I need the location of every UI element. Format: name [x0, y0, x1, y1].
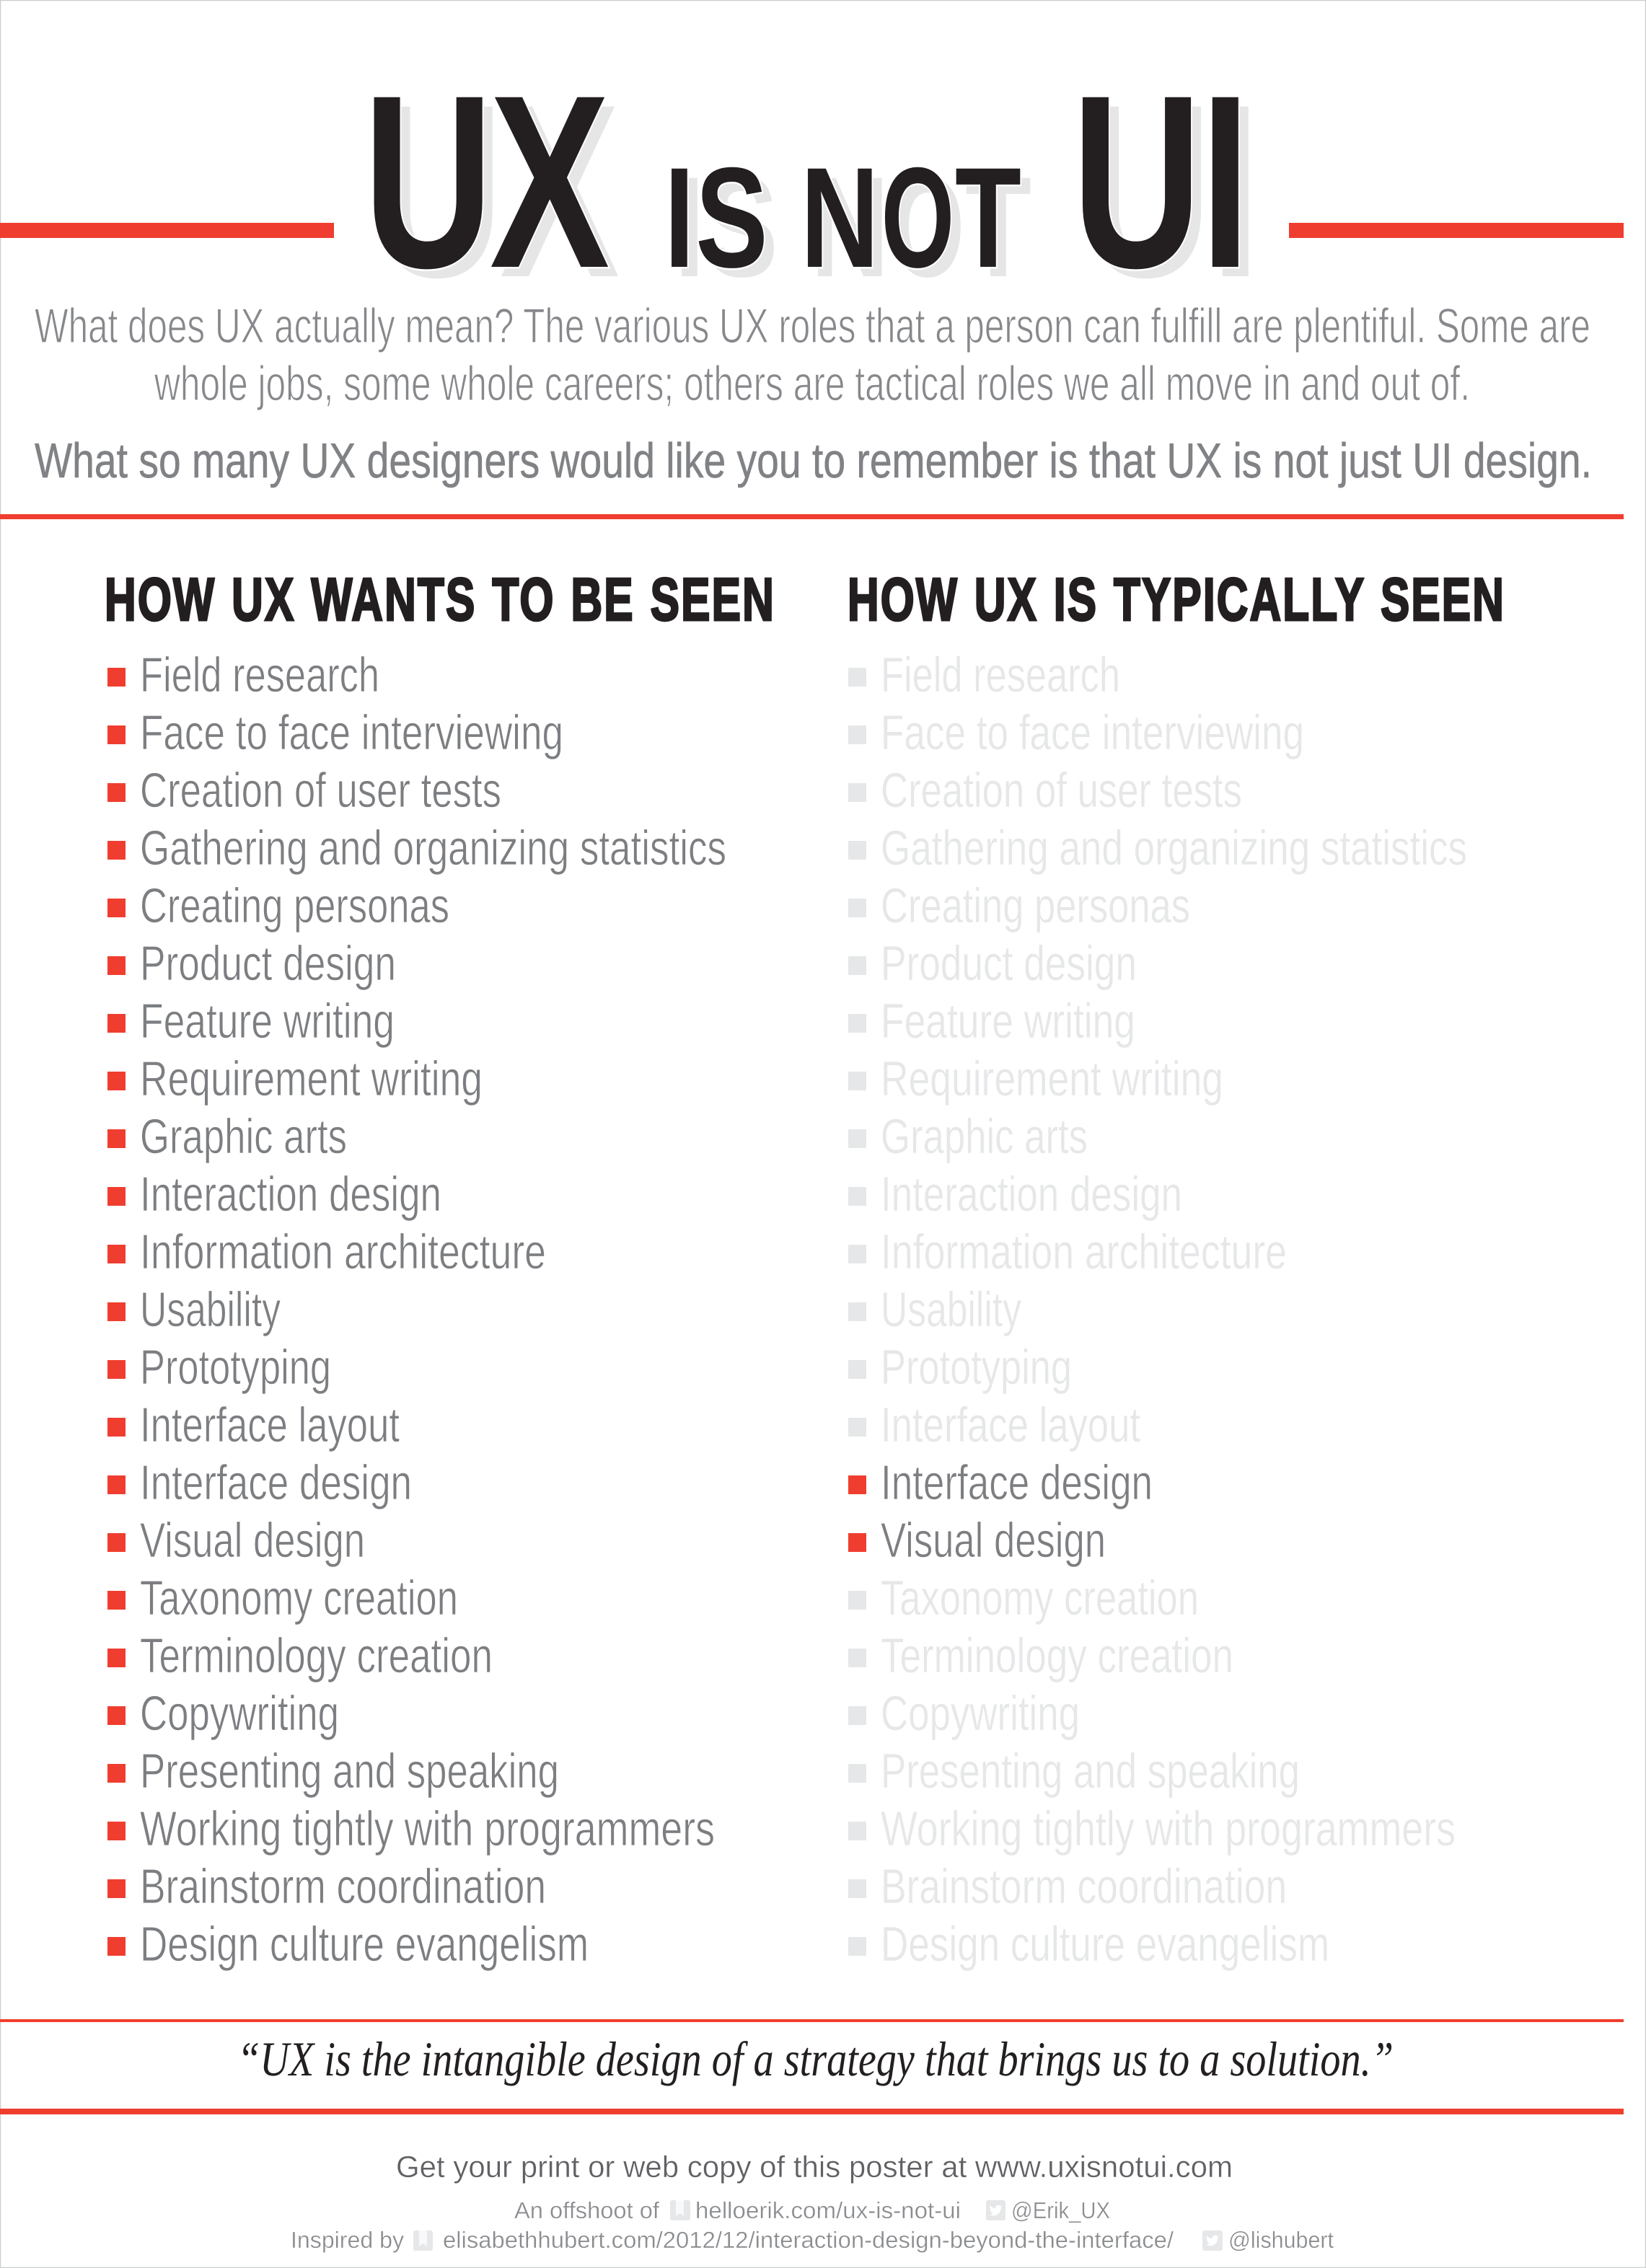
icon: bookmark: [670, 2200, 690, 2220]
item: Product design: Product design: [140, 936, 396, 991]
item: Feature writing: Feature writing: [140, 994, 395, 1049]
title: IS: [674, 147, 778, 306]
title: UX: [364, 44, 611, 319]
icon: twitter: [986, 2200, 1005, 2220]
list: how UX wants to be seen: [107, 648, 726, 1972]
item: Prototyping (faded): [848, 1340, 1072, 1395]
item: Requirement writing (faded): Requirement writing: [881, 1051, 1223, 1106]
item: Gathering and organizing statistics (faded): Gathering and organizing statistics: [881, 821, 1467, 875]
credit line 1: helloerik.com/ux-is-not-ui: [695, 2197, 961, 2223]
item: Brainstorm coordination: Brainstorm coordination: [140, 1859, 546, 1914]
item: Visual design (highlighted): [848, 1513, 1106, 1568]
item: Working tightly with programmers (faded): Working tightly with programmers: [881, 1801, 1456, 1856]
item: Graphic arts (faded): Graphic arts: [881, 1109, 1088, 1164]
item: Field research: Field research: [140, 648, 379, 702]
title: UI: [1082, 53, 1260, 329]
item: Prototyping: Prototyping: [140, 1340, 331, 1395]
title: O: [881, 138, 954, 297]
item: Feature writing (faded): Feature writing: [881, 994, 1135, 1049]
title: T: [955, 138, 1021, 297]
credit line 2: [291, 2227, 1334, 2253]
credit line 1: An offshoot of: [514, 2197, 659, 2223]
item: Brainstorm coordination (faded): Brainstorm coordination: [881, 1859, 1287, 1914]
item: Graphic arts: [107, 1109, 347, 1164]
item: Creating personas (faded): Creating personas: [881, 878, 1190, 933]
credit line 1: @Erik_UX: [1011, 2197, 1110, 2223]
item: Visual design (highlighted): Visual design: [881, 1513, 1106, 1568]
item: Requirement writing: Requirement writing: [140, 1051, 483, 1106]
item: Information architecture: Information architecture: [140, 1225, 546, 1279]
item: Design culture evangelism: Design culture evangelism: [140, 1917, 589, 1972]
title: UX: [374, 53, 621, 329]
item: Usability (faded): [848, 1282, 1021, 1337]
title rule left: [0, 223, 334, 238]
item: Creation of user tests: Creation of user tests: [140, 763, 501, 818]
item: Product design (faded): Product design: [881, 936, 1137, 991]
credit line 1: [514, 2197, 1110, 2223]
item: Presenting and speaking: Presenting and speaking: [140, 1744, 559, 1799]
intro text: [35, 299, 1590, 411]
title: N: [811, 147, 889, 306]
credit line 2: elisabethhubert.com/2012/12/interaction-design-beyond-the-interface/: [443, 2227, 1174, 2253]
item: Taxonomy creation (faded): Taxonomy creation: [881, 1571, 1199, 1625]
item: Terminology creation: Terminology creation: [140, 1628, 493, 1683]
divider: [0, 514, 1624, 519]
title: UI: [1072, 44, 1250, 319]
item: Field research: [107, 648, 379, 702]
item: Interface layout (faded): Interface layout: [881, 1398, 1140, 1452]
icon: twitter: [1202, 2231, 1223, 2251]
item: Interface layout: Interface layout: [140, 1398, 400, 1452]
item: Creation of user tests (faded): Creation of user tests: [881, 763, 1242, 818]
item: Taxonomy creation: Taxonomy creation: [140, 1571, 458, 1625]
credit line 2: @lishubert: [1228, 2227, 1334, 2253]
item: Copywriting: Copywriting: [140, 1686, 339, 1741]
item: Face to face interviewing: Face to face interviewing: [140, 705, 563, 760]
item: Visual design: [107, 1513, 365, 1568]
item: Copywriting (faded): Copywriting: [881, 1686, 1080, 1741]
item: Copywriting: [107, 1686, 339, 1741]
item: Visual design: Visual design: [140, 1513, 365, 1568]
call to action: Get your print or web copy of this poster at www.uxisnotui.com: [396, 2150, 1233, 2184]
item: Information architecture (faded): Information architecture: [881, 1225, 1287, 1279]
title: N: [801, 138, 879, 297]
title: [364, 44, 1260, 329]
item: Usability: Usability: [140, 1282, 281, 1337]
item: Design culture evangelism (faded): Design culture evangelism: [881, 1917, 1329, 1972]
quote rule bottom: [0, 2109, 1624, 2114]
item: Interface design: Interface design: [140, 1455, 412, 1510]
item: Gathering and organizing statistics: Gathering and organizing statistics: [140, 821, 726, 875]
list: how UX is typically seen: [848, 648, 1467, 1972]
item: Prototyping: [107, 1340, 331, 1395]
item: Interaction design: Interaction design: [140, 1167, 441, 1222]
item: Creating personas: Creating personas: [140, 878, 449, 933]
item: Prototyping (faded): Prototyping: [881, 1340, 1072, 1395]
item: Presenting and speaking (faded): Presenting and speaking: [881, 1744, 1300, 1799]
item: Field research (faded): [848, 648, 1120, 702]
item: Working tightly with programmers: Working tightly with programmers: [140, 1801, 715, 1856]
item: Graphic arts (faded): [848, 1109, 1088, 1164]
icon: bookmark: [413, 2231, 433, 2251]
item: Face to face interviewing (faded): Face to face interviewing: [881, 705, 1304, 760]
item: Graphic arts: Graphic arts: [140, 1109, 347, 1164]
title: O: [892, 147, 964, 306]
item: Copywriting (faded): [848, 1686, 1080, 1741]
quote rule top: [0, 2019, 1624, 2022]
item: Usability: [107, 1282, 281, 1337]
quote: “UX is the intangible design of a strategy that brings us to a solution.”: [237, 2031, 1394, 2086]
item: Usability (faded): Usability: [881, 1282, 1021, 1337]
title: T: [965, 147, 1031, 306]
item: Interaction design (faded): Interaction design: [881, 1167, 1182, 1222]
item: Terminology creation (faded): Terminology creation: [881, 1628, 1233, 1683]
item: Field research (faded): Field research: [881, 648, 1120, 702]
credit line 2: Inspired by: [291, 2227, 404, 2253]
heading: how UX wants to be seen: HOW UX WANTS TO BE SEEN: [105, 565, 775, 633]
title: IS: [664, 138, 768, 297]
title rule right: [1289, 223, 1624, 238]
item: Interface design (highlighted): Interface design: [881, 1455, 1153, 1510]
